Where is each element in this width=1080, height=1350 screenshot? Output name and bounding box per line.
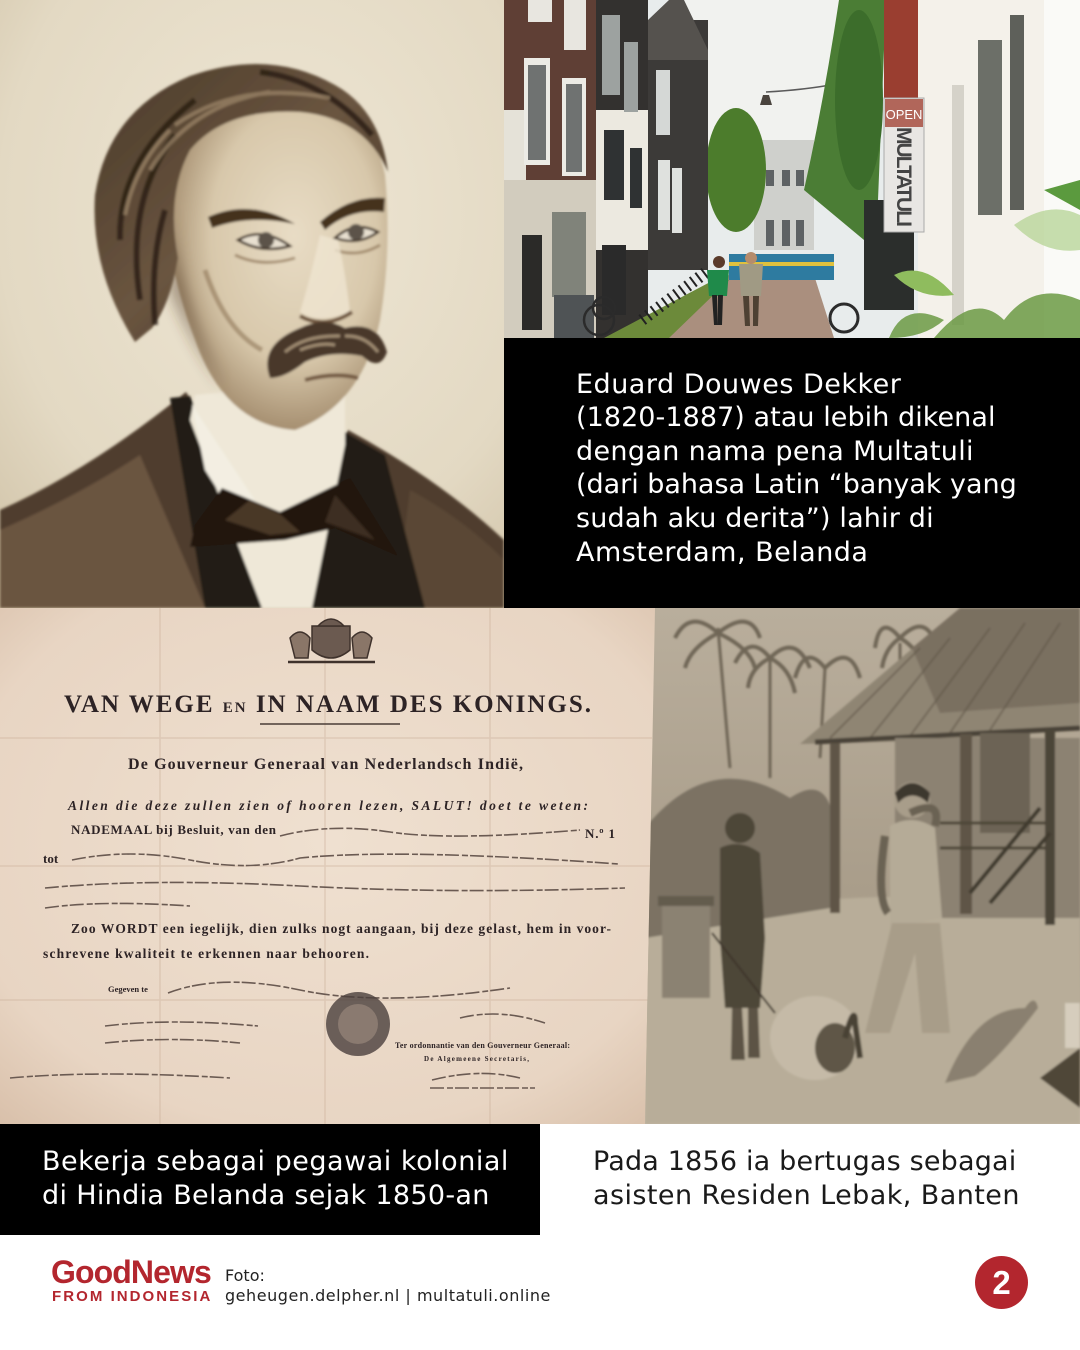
- palms: [675, 622, 935, 778]
- photo: colonial appointment document: [0, 608, 655, 1124]
- text: photo credits: [225, 1266, 551, 1305]
- photo: colonial appointment document: Ter ordonnantie van den Gouverneur Generaal:: [395, 1041, 570, 1050]
- text: biography: sudah aku derita”) lahir di: [576, 503, 934, 534]
- street: [654, 275, 834, 338]
- text: Lebak caption: asisten Residen Lebak, Banten: [593, 1180, 1020, 1211]
- panel: biography caption: [504, 338, 1080, 608]
- text: biography: (dari bahasa Latin “banyak yang: [576, 469, 1017, 500]
- foreground leaves: [889, 293, 1080, 338]
- photo: colonial appointment document: VAN WEGE EN IN NAAM DES KONINGS.: [64, 691, 591, 718]
- seal: [326, 992, 390, 1056]
- text: biography: (1820-1887) atau lebih dikenal: [576, 402, 996, 433]
- pillar: [662, 903, 710, 998]
- right white building: [918, 0, 1080, 338]
- photo: colonial appointment document: De Gouverneur Generaal van Nederlandsch Indië,: [128, 756, 523, 773]
- text: photo credits: Foto:: [225, 1266, 265, 1285]
- page number badge: 2: [992, 1264, 1011, 1301]
- panel: colonial employee caption: Bekerja sebagai pegawai kolonial: [42, 1146, 509, 1177]
- text: photo credits: geheugen.delpher.nl | multatuli.online: [225, 1286, 551, 1305]
- brows: [208, 209, 295, 228]
- building left brick: [504, 0, 596, 338]
- panel: colonial employee caption: di Hindia Belanda sejak 1850-an: [42, 1180, 490, 1211]
- text: Lebak caption: [593, 1146, 1020, 1211]
- pedestrians: [707, 256, 729, 325]
- photo: colonial appointment document: Zoo WORDT een iegelijk, dien zulks nogt aangaan, bij deze gelast, hem in voor-: [71, 921, 611, 936]
- banner: MULTATULI: [892, 127, 915, 227]
- inner vest: [170, 396, 262, 608]
- bow tie: [190, 478, 398, 556]
- European man: [865, 782, 950, 1033]
- text: biography: dengan nama pena Multatuli: [576, 436, 974, 467]
- black building: [648, 20, 708, 270]
- ground: [645, 897, 1080, 1124]
- eyes: [238, 234, 290, 249]
- page number badge: [975, 1256, 1028, 1309]
- crest: [288, 619, 375, 662]
- hut: [801, 650, 1080, 744]
- banner: [884, 98, 924, 232]
- collar: [190, 380, 345, 608]
- photo: colonial appointment document: Gegeven te: [108, 984, 148, 994]
- photo: portrait of Eduard Douwes Dekker: [0, 0, 504, 608]
- hair: [94, 64, 388, 342]
- nose: [300, 235, 350, 318]
- logo: GoodNews from Indonesia: FROM INDONESIA: [52, 1288, 212, 1305]
- banner: OPEN: [886, 107, 922, 122]
- foliage: [645, 779, 835, 938]
- logo: GoodNews from Indonesia: [51, 1254, 212, 1305]
- text: biography: [576, 369, 1017, 568]
- trees: [706, 108, 766, 232]
- photo: illustration of colonial scene with turkeys: [645, 608, 1080, 1124]
- blue fence: [729, 254, 834, 280]
- photo: colonial appointment document: N.º 1: [585, 826, 615, 841]
- fence and bikes: [642, 270, 709, 320]
- neck: [210, 330, 345, 409]
- distant building: [754, 140, 814, 250]
- right brick strip: [884, 0, 920, 100]
- photo: colonial appointment document: Allen die deze zullen zien of hooren lezen, SALUT! doet te weten:: [67, 798, 588, 813]
- panel: colonial employee caption: [0, 1124, 540, 1235]
- coat: [0, 392, 504, 608]
- text: biography: Eduard Douwes Dekker: [576, 369, 901, 400]
- photo: colonial appointment document: schrevene kwaliteit te erkennen naar behooren.: [43, 946, 369, 961]
- photo: colonial appointment document: De Algemeene Secretaris,: [424, 1055, 529, 1063]
- face: [164, 95, 388, 430]
- photo: Multatuli museum street in Amsterdam: [504, 0, 1080, 338]
- standing servant: [712, 813, 775, 1060]
- photo: colonial appointment document: NADEMAAL bij Besluit, van den: [71, 822, 277, 837]
- text: Lebak caption: Pada 1856 ia bertugas sebagai: [593, 1146, 1016, 1177]
- photo: colonial appointment document: tot: [43, 851, 59, 866]
- turkeys: [770, 996, 860, 1080]
- dark building: [596, 0, 648, 338]
- moustache: [267, 322, 387, 378]
- lamp: [766, 84, 836, 92]
- text: biography: Amsterdam, Belanda: [576, 537, 868, 568]
- logo: GoodNews from Indonesia: GoodNews: [51, 1254, 211, 1290]
